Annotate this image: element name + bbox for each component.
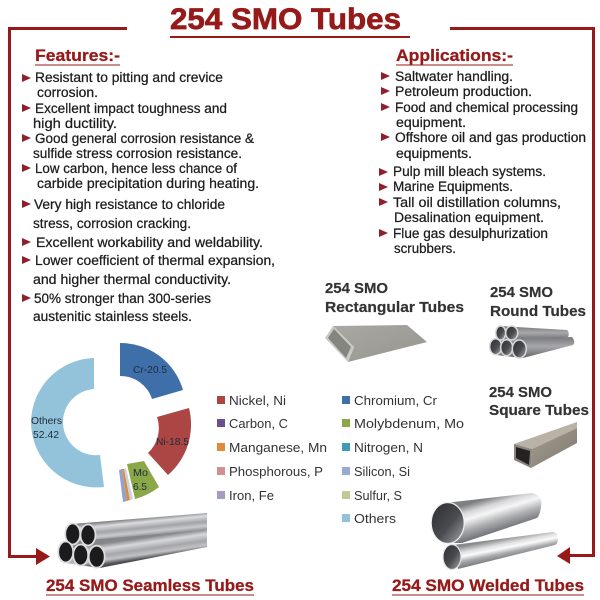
features list: 50% stronger than 300-series bbox=[34, 291, 211, 306]
legend: Silicon, Si bbox=[354, 464, 410, 479]
legend bbox=[217, 393, 464, 526]
applications list: Marine Equipments. bbox=[393, 179, 513, 194]
features list: corrosion. bbox=[37, 85, 98, 100]
applications list: Saltwater handling. bbox=[395, 69, 513, 84]
applications list: Food and chemical processing bbox=[395, 100, 578, 115]
features list: Excellent impact toughness and bbox=[35, 101, 227, 116]
legend: Sulfur, S bbox=[354, 488, 402, 503]
label: round tubes: Round Tubes bbox=[490, 304, 586, 320]
image: seamless tubes bbox=[58, 513, 207, 568]
caption: welded tubes: 254 SMO Welded Tubes bbox=[392, 576, 584, 595]
features list bbox=[22, 70, 275, 324]
panel: applications bbox=[379, 46, 586, 256]
image: rectangular tube bbox=[325, 325, 427, 362]
image: square tube bbox=[514, 422, 577, 468]
legend: Molybdenum, Mo bbox=[354, 416, 464, 431]
features list: Resistant to pitting and crevice bbox=[35, 70, 223, 85]
data labels: Mo bbox=[133, 467, 148, 479]
data labels: 52.42 bbox=[33, 429, 59, 441]
applications list: Offshore oil and gas production bbox=[395, 130, 586, 145]
applications list: scrubbers. bbox=[394, 241, 456, 256]
label: square tubes: 254 SMO bbox=[489, 385, 552, 401]
features list: carbide precipitation during heating. bbox=[37, 176, 259, 191]
applications list: Tall oil distillation columns, bbox=[393, 195, 561, 210]
label: square tubes bbox=[489, 385, 589, 419]
features list: Very high resistance to chloride bbox=[34, 197, 225, 212]
features list: high ductility. bbox=[33, 116, 117, 131]
applications list: equipment. bbox=[396, 115, 466, 130]
applications list: equipments. bbox=[396, 146, 472, 161]
applications list: Petroleum production. bbox=[395, 84, 532, 99]
applications list: Flue gas desulphurization bbox=[393, 226, 548, 241]
data labels: Others bbox=[31, 415, 62, 427]
data labels: Cr-20.5 bbox=[133, 364, 167, 376]
features list: Good general corrosion resistance & bbox=[35, 131, 254, 146]
legend: Carbon, C bbox=[229, 416, 288, 431]
slices: minor elements bbox=[119, 468, 133, 502]
legend: Manganese, Mn bbox=[229, 440, 327, 455]
features list: stress, corrosion cracking. bbox=[33, 216, 191, 231]
frame: right bracket with arrow to welded tubes bbox=[450, 27, 595, 564]
donut chart: composition bbox=[31, 343, 191, 502]
legend: Chromium, Cr bbox=[354, 393, 438, 408]
label: rectangular tubes: Rectangular Tubes bbox=[325, 300, 464, 316]
legend: Nitrogen, N bbox=[354, 440, 423, 455]
data labels: Ni-18.5 bbox=[156, 436, 189, 448]
legend: Others bbox=[354, 511, 397, 526]
applications list: Pulp mill bleach systems. bbox=[393, 164, 546, 179]
features list: sulfide stress corrosion resistance. bbox=[33, 146, 242, 161]
slice: chromium bbox=[120, 343, 183, 399]
applications list: Desalination equipment. bbox=[394, 210, 544, 225]
label: rectangular tubes: 254 SMO bbox=[325, 281, 388, 297]
label: rectangular tubes bbox=[325, 281, 464, 316]
image: welded tubes bbox=[431, 493, 558, 570]
label: square tubes: Square Tubes bbox=[489, 403, 589, 419]
data labels: 6.5 bbox=[133, 481, 147, 493]
data labels bbox=[31, 364, 189, 493]
panel: features bbox=[22, 46, 275, 324]
features list: and higher thermal conductivity. bbox=[33, 272, 231, 287]
label: round tubes: 254 SMO bbox=[490, 285, 553, 301]
features list: austenitic stainless steels. bbox=[33, 309, 192, 324]
legend: Phosphorous, P bbox=[229, 464, 323, 479]
heading: features: Features:- bbox=[35, 46, 120, 65]
slice: molybdenum bbox=[127, 461, 159, 499]
label: round tubes bbox=[490, 285, 586, 320]
title: 254 SMO Tubes bbox=[170, 3, 401, 36]
legend: Iron, Fe bbox=[229, 488, 274, 503]
slice: nickel bbox=[148, 408, 191, 475]
features list: Lower coefficient of thermal expansion, bbox=[35, 253, 275, 268]
slice: others bbox=[31, 358, 104, 487]
caption: seamless tubes: 254 SMO Seamless Tubes bbox=[46, 576, 254, 595]
legend: Nickel, Ni bbox=[229, 393, 286, 408]
features list: Excellent workability and weldability. bbox=[36, 235, 263, 250]
heading: applications: Applications:- bbox=[396, 46, 513, 65]
features list: Low carbon, hence less chance of bbox=[35, 161, 237, 176]
applications list bbox=[379, 69, 586, 256]
frame: left bracket with arrow to seamless tubes bbox=[8, 27, 127, 565]
image: round tubes bbox=[490, 326, 574, 358]
